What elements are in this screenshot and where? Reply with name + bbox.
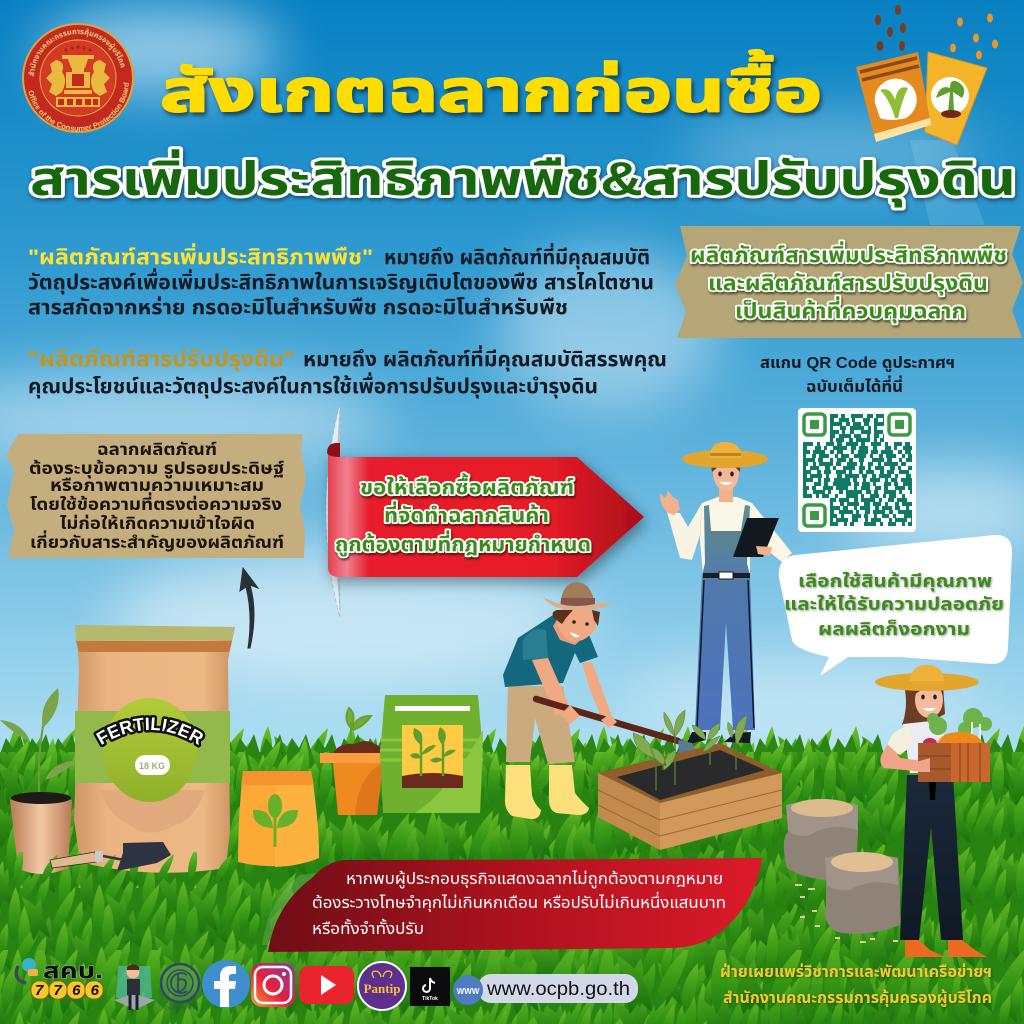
speech bubble: เลือกใช้สินค้ามีคุณภาพ bbox=[798, 571, 992, 592]
banner: controlled label products: ผลิตภัณฑ์สารเพิ่มประสิทธิภาพพืช bbox=[690, 241, 1007, 267]
illustration: standing farmer bbox=[660, 442, 792, 745]
text block: soil conditioner definition bbox=[28, 345, 667, 398]
logo: consumer protection board seal bbox=[22, 23, 134, 133]
footer: pantip icon bbox=[358, 962, 406, 1010]
speech bubble bbox=[779, 535, 1012, 676]
banner: controlled label products: เป็นสินค้าที่ควบคุมฉลาก bbox=[735, 296, 966, 324]
footer: website link: WWW bbox=[457, 987, 480, 996]
panel: label requirements: โดยใช้ข้อความที่ตรงต่อความจริง bbox=[30, 492, 282, 514]
background: grass field bbox=[0, 718, 1024, 1024]
icon: seed packets bbox=[856, 5, 998, 145]
illustration: orange fertilizer pouch bbox=[238, 771, 319, 867]
arrow banner: buy correctly labelled products: ถูกต้องตามที่กฎหมายกำหนด bbox=[335, 530, 591, 556]
footer: website link bbox=[453, 974, 638, 1005]
footer: avatar icon bbox=[114, 964, 155, 1010]
footer: hotline 1166 logo: สคบ. bbox=[43, 958, 103, 983]
footer: department credit: ฝ่ายเผยแพร่วิชาการและพัฒนาเครือข่ายฯ bbox=[720, 963, 992, 981]
illustration: bending farmer with hoe bbox=[503, 582, 704, 819]
arrow banner: buy correctly labelled products: ขอให้เลือกซื้อผลิตภัณฑ์ bbox=[360, 473, 574, 499]
panel: label requirements: ต้องระบุข้อความ รูปรอยประดิษฐ์ bbox=[29, 459, 284, 479]
footer: emblem icon bbox=[161, 964, 199, 1012]
QR caption: สแกน QR Code ดูประกาศฯ bbox=[760, 355, 955, 373]
footer: facebook icon bbox=[202, 960, 250, 1008]
illustration: planter box with seedlings bbox=[598, 710, 782, 850]
subtitle: สารเพิ่มประสิทธิภาพพืช&สารปรับปรุงดิน bbox=[30, 149, 1016, 207]
title: สังเกตฉลากก่อนซื้อ bbox=[160, 49, 822, 124]
panel: label requirements bbox=[6, 434, 306, 558]
text block: soil conditioner definition: "ผลิตภัณฑ์สารปรับปรุงดิน" bbox=[28, 348, 295, 372]
text block: soil conditioner definition: หมายถึง ผลิตภัณฑ์ที่มีคุณสมบัติสรรพคุณ bbox=[303, 345, 667, 371]
panel: label requirements: หรือภาพตามความเหมาะสม bbox=[50, 476, 264, 495]
footer: youtube icon bbox=[299, 966, 354, 1004]
footer: tiktok icon bbox=[410, 967, 450, 1006]
icon: curved black arrow bbox=[240, 568, 258, 648]
QR caption bbox=[760, 355, 955, 396]
footer: tiktok icon: TikTok bbox=[422, 996, 438, 1002]
logo: consumer protection board seal: สำนักงานคณะกรรมการคุ้มครองผู้บริโภค bbox=[28, 28, 124, 76]
footer: website link: www.ocpb.go.th bbox=[486, 979, 630, 1000]
illustration: grain sacks bbox=[784, 799, 900, 943]
footer: hotline 1166 logo: 7766 bbox=[35, 982, 100, 999]
arrow banner: buy correctly labelled products: ที่จัดทำฉลากสินค้า bbox=[384, 501, 549, 527]
foreground grass blades bbox=[0, 852, 236, 888]
footer: pantip icon: Pantip bbox=[364, 981, 400, 996]
banner: controlled label products bbox=[675, 226, 1023, 338]
logo: consumer protection board seal: Office of the Consumer Protection Board bbox=[28, 82, 129, 132]
QR code bbox=[798, 408, 916, 532]
footer: emblem icon: OCPB OPMT bbox=[165, 1006, 195, 1012]
footer: department credit: สำนักงานคณะกรรมการคุ้มครองผู้บริโภค bbox=[723, 989, 992, 1008]
panel: label requirements: เกี่ยวกับสาระสำคัญของผลิตภัณฑ์ bbox=[30, 530, 284, 552]
footer: department credit bbox=[720, 963, 992, 1008]
arrow banner: buy correctly labelled products bbox=[326, 404, 644, 618]
illustration: fertilizer bag bbox=[74, 625, 235, 873]
footer: instagram icon bbox=[251, 963, 295, 1007]
footer: hotline 1166 logo bbox=[16, 958, 103, 999]
text block: plant enhancer definition: "ผลิตภัณฑ์สารเพิ่มประสิทธิภาพพืช" bbox=[28, 243, 373, 269]
panel: penalty warning: หากพบผู้ประกอบธุรกิจแสดงฉลากไม่ถูกต้องตามกฎหมาย bbox=[346, 870, 723, 888]
illustration: garden trowel bbox=[50, 842, 171, 871]
text block: soil conditioner definition: คุณประโยชน์และวัตถุประสงค์ในการใช้เพื่อการปรับปรุงและบำรุงดิน bbox=[28, 372, 598, 398]
text block: plant enhancer definition: สารสกัดจากหร่าย กรดอะมิโนสำหรับพืช กรดอะมิโนสำหรับพืช bbox=[28, 297, 568, 319]
panel: label requirements: ไม่ก่อให้เกิดความเข้าใจผิด bbox=[60, 513, 255, 533]
illustration: green seed bag bbox=[380, 695, 483, 813]
speech bubble: และให้ได้รับความปลอดภัย bbox=[784, 594, 1004, 614]
panel: penalty warning: ต้องระวางโทษจำคุกไม่เกินหกเดือน หรือปรับไม่เกินหนึ่งแสนบาท bbox=[312, 891, 726, 912]
illustration: potted seedling bbox=[0, 688, 78, 874]
illustration: fertilizer bag: FERTILIZER bbox=[94, 715, 206, 748]
QR caption: ฉบับเต็มได้ที่นี่ bbox=[806, 375, 903, 396]
illustration: fertilizer bag: 18 KG bbox=[139, 761, 165, 771]
banner: controlled label products: และผลิตภัณฑ์สารปรับปรุงดิน bbox=[708, 272, 988, 296]
panel: label requirements: ฉลากผลิตภัณฑ์ bbox=[97, 440, 217, 459]
text block: plant enhancer definition bbox=[28, 243, 654, 319]
illustration: terracotta pot bbox=[320, 708, 395, 815]
panel: penalty warning bbox=[262, 858, 762, 952]
speech bubble: ผลผลิตก็งอกงาม bbox=[818, 619, 970, 639]
panel: penalty warning: หรือทั้งจำทั้งปรับ bbox=[312, 918, 424, 938]
text block: plant enhancer definition: หมายถึง ผลิตภัณฑ์ที่มีคุณสมบัติ bbox=[384, 243, 650, 269]
text block: plant enhancer definition: วัตถุประสงค์เพื่อเพิ่มประสิทธิภาพในการเจริญเติบโตของพืช สารไคโตซาน bbox=[28, 268, 654, 294]
illustration: farmer woman with crate bbox=[875, 665, 992, 957]
